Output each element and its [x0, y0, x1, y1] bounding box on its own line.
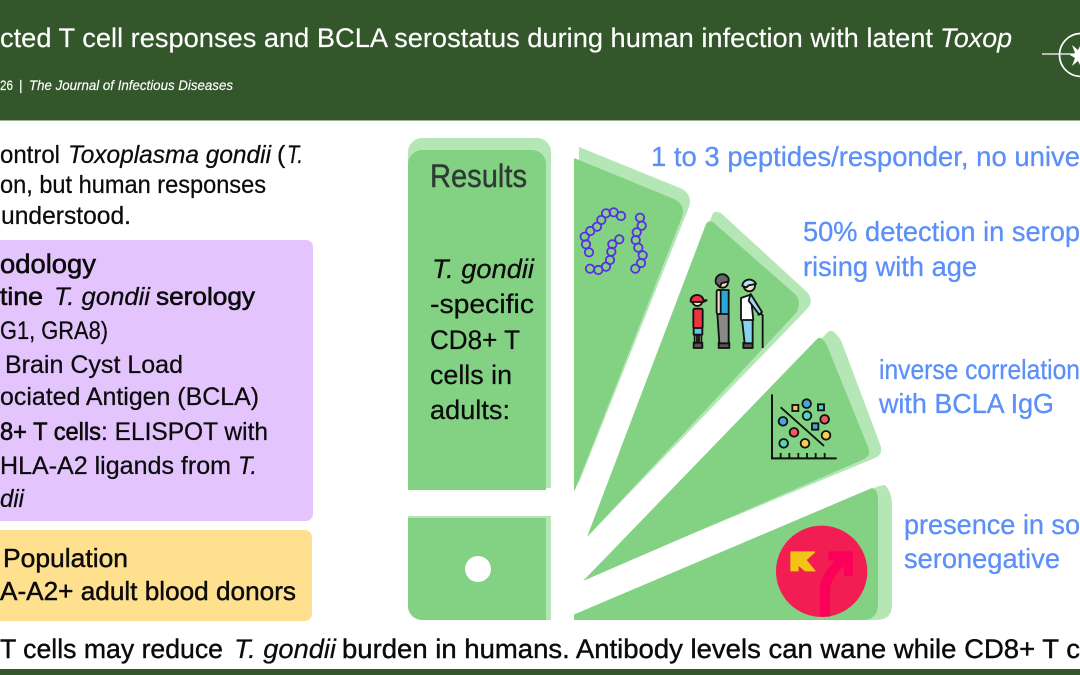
intro text: T. [287, 141, 303, 169]
finding 4 [904, 509, 1080, 574]
intro text: understood. [1, 202, 131, 230]
wedge 4: seronegative [574, 485, 892, 620]
icon: diverging arrows badge [776, 526, 867, 617]
footer band [0, 669, 1080, 675]
intro text: ( [277, 141, 286, 169]
intro text: Toxoplasma gondii [68, 141, 272, 169]
wedge 2: detection [587, 212, 811, 537]
results subject text: cells in [430, 360, 512, 390]
finding 3: with BCLA IgG [878, 388, 1054, 419]
methodology list: tine [0, 283, 43, 311]
methodology list: serology [156, 283, 256, 311]
results subject text: adults: [430, 395, 510, 425]
finding 2 [803, 216, 1080, 282]
methodology list: Brain Cyst Load [5, 351, 183, 379]
citation line: The Journal of Infectious Diseases [29, 77, 233, 93]
finding 1: 1 to 3 peptides/responder, no unive [651, 141, 1080, 172]
finding 3 [878, 354, 1080, 419]
methodology list: 8+ T cells [0, 418, 101, 446]
panel: binder lower tab [408, 516, 551, 620]
title: cted T cell responses and BCLA serostatus during human infection with latent [0, 23, 933, 53]
results subject text [430, 254, 535, 425]
methodology heading: odology [0, 249, 96, 279]
conclusion text [0, 634, 1080, 664]
wedge 3: correlation [583, 331, 881, 581]
logo icon [1042, 34, 1080, 76]
intro text [0, 141, 303, 230]
wedge 1: peptides [574, 147, 690, 490]
icon: three people by age [691, 274, 763, 348]
finding 2: 50% detection in serop [803, 216, 1080, 247]
results subject text: CD8+ T [430, 325, 520, 355]
results subject text: -specific [430, 289, 534, 319]
methodology list: T. gondii [54, 283, 151, 311]
results subject text: T. gondii [432, 254, 535, 284]
panel: methodology [0, 240, 313, 521]
intro text: on, but human responses [0, 171, 266, 199]
methodology list: T. [238, 452, 257, 480]
citation line: 26 [0, 77, 13, 93]
conclusion text: T cells may reduce [0, 634, 223, 664]
title: Toxop [940, 23, 1012, 53]
panel: results [408, 138, 551, 490]
methodology list [0, 283, 268, 513]
icon: scatter plot [772, 394, 837, 458]
finding 2: rising with age [803, 251, 977, 282]
finding 4: seronegative [904, 543, 1060, 574]
header band [0, 0, 1080, 121]
methodology list: ociated Antigen (BCLA) [0, 383, 259, 411]
intro text: ontrol [0, 141, 60, 169]
panel: population: A-A2+ adult blood donors [0, 576, 296, 606]
conclusion text: T. gondii [234, 634, 337, 664]
methodology list: : ELISPOT with [101, 418, 268, 446]
methodology list: G1, GRA8) [0, 317, 108, 345]
icon: peptide chains [580, 208, 647, 274]
citation line: | [19, 77, 23, 93]
results heading: Results [430, 158, 527, 194]
conclusion text: burden in humans. Antibody levels can wane while CD8+ T c [342, 634, 1080, 664]
panel: population: Population [3, 543, 128, 573]
panel: population [0, 530, 312, 621]
methodology list: dii [0, 485, 25, 513]
methodology list: HLA-A2 ligands from [0, 452, 231, 480]
